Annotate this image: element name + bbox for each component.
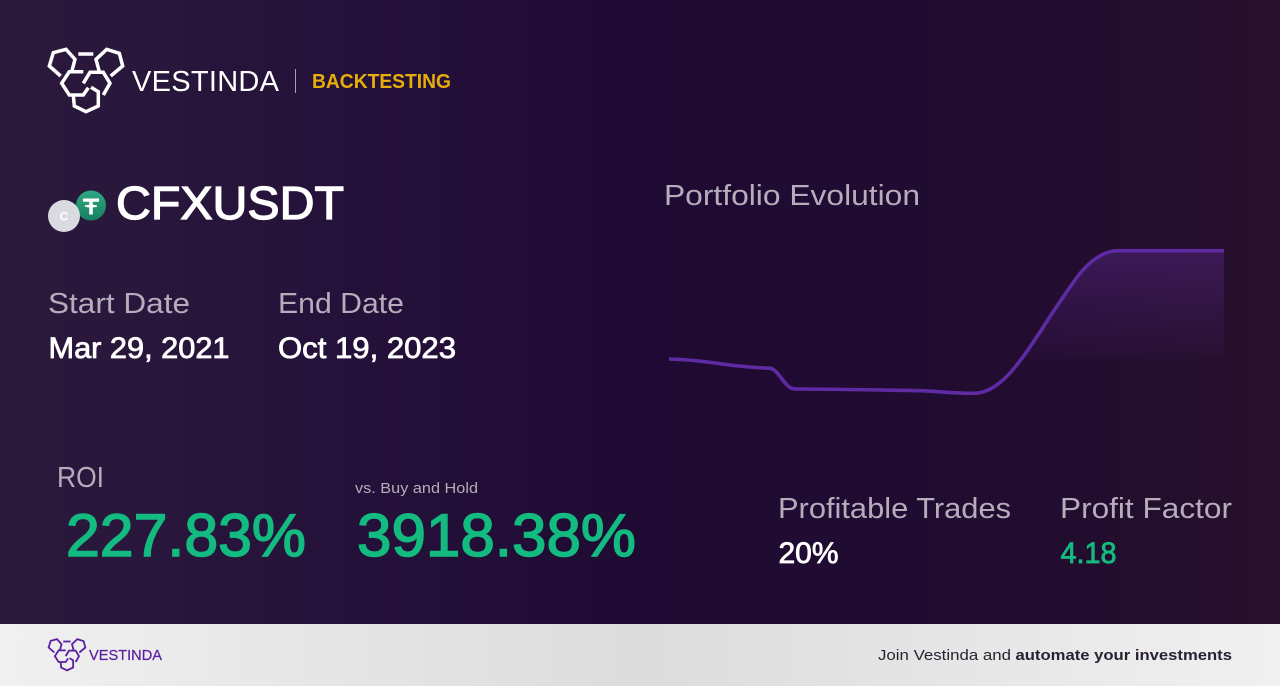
icon: CFX coin: C [60,210,69,224]
profitable trades: Profitable Trades [778,493,1011,525]
end date [278,288,456,365]
call to action: automate your investments [1016,647,1232,664]
icon: Vestinda hexagon logo [49,49,123,112]
chart heading: Portfolio Evolution [664,180,920,212]
vs buy and hold: 3918.38% [357,502,636,569]
ROI [57,462,306,569]
start date: Mar 29, 2021 [48,332,230,365]
profitable trades: 20% [778,537,838,570]
area fill under line [1022,251,1224,359]
trade metrics [778,493,1233,570]
tag: backtesting: BACKTESTING [312,71,451,93]
footer bar [0,624,1280,686]
end date: Oct 19, 2023 [278,332,456,365]
header: logo and section tag [49,49,451,112]
vs buy and hold: vs. Buy and Hold [355,480,478,497]
ROI: ROI [57,462,104,494]
date range [48,288,456,365]
start date: Start Date [48,288,190,320]
ROI metrics [57,462,636,569]
pair heading [48,177,344,232]
profit factor: Profit Factor [1060,493,1233,525]
icon: footer logo [49,639,85,670]
end date: End Date [278,288,404,320]
call to action [878,647,1232,664]
call to action: Join Vestinda and [878,647,1011,664]
icon: CFX coin [48,200,80,232]
chart: portfolio evolution [664,180,1224,393]
portfolio line [669,251,1224,393]
profitable trades [778,493,1011,570]
start date [48,288,230,365]
title: pair name: CFXUSDT [116,177,344,229]
footer wordmark: VESTINDA [89,647,162,664]
profit factor [1060,493,1233,570]
wordmark: VESTINDA [132,66,280,98]
profit factor: 4.18 [1060,537,1116,570]
icon: tether coin [76,190,106,220]
ROI: 227.83% [66,502,306,569]
